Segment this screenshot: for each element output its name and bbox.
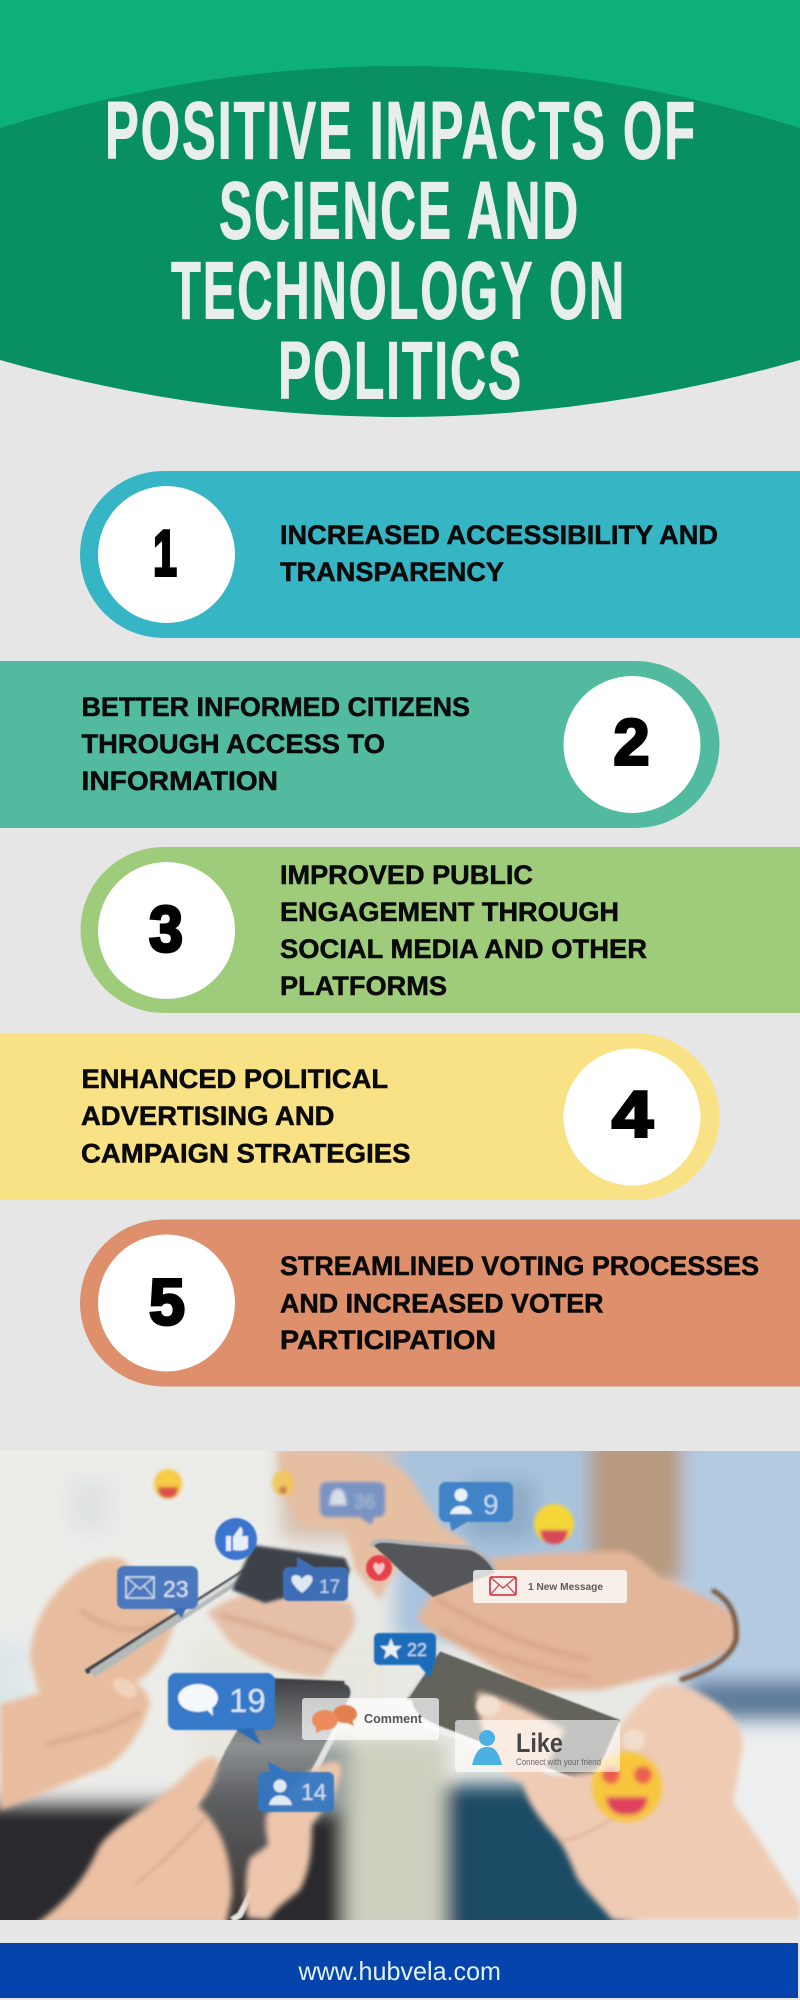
number circle 1: 1 (153, 516, 177, 590)
panel: item 1 (80, 471, 800, 638)
emoji: laughing right (534, 1504, 574, 1544)
title: SCIENCE AND (219, 166, 580, 256)
phone: grey upper right (371, 1540, 497, 1597)
emoji: faint yellow small (272, 1470, 294, 1496)
footer bar (0, 1943, 798, 1998)
text: item 2 (82, 692, 470, 796)
number circle 1 (98, 486, 235, 623)
number circle 4 (564, 1048, 700, 1186)
card: 1 New Message (473, 1570, 627, 1603)
panel: item 5 (80, 1220, 800, 1386)
card: Like (455, 1720, 620, 1772)
website url: www.hubvela.com (298, 1956, 501, 1986)
number circle 5: 5 (149, 1266, 185, 1338)
text: item 3: IMPROVED PUBLIC (280, 860, 533, 890)
title (105, 86, 697, 416)
number circle 5 (98, 1234, 235, 1372)
text: item 4 (81, 1064, 411, 1168)
number circle 3 (98, 862, 235, 999)
number circle 4: 4 (612, 1078, 653, 1150)
text: item 5: PARTICIPATION (280, 1325, 496, 1355)
text: item 4: ADVERTISING AND (81, 1101, 334, 1131)
hands upper layer (0, 1451, 737, 1810)
badge: star 22 (374, 1633, 436, 1678)
text: item 3: PLATFORMS (280, 971, 447, 1001)
card: Comment: Comment (364, 1711, 423, 1726)
header banner (0, 0, 800, 417)
text: item 2: THROUGH ACCESS TO (82, 729, 385, 759)
skin fold lines (45, 1598, 590, 1745)
badge: comment 19: 19 (229, 1682, 266, 1719)
text: item 2: BETTER INFORMED CITIZENS (82, 692, 470, 722)
number circle 2 (564, 676, 700, 813)
finger nails and hand details (110, 1675, 645, 1885)
text: item 5: AND INCREASED VOTER (280, 1288, 604, 1318)
blurred clothing background (0, 1451, 800, 1920)
card: Like: Like (516, 1728, 563, 1758)
badge: heart 17 (283, 1557, 348, 1601)
badge: star 22: 22 (407, 1640, 427, 1660)
badge: mail 23: 23 (163, 1576, 189, 1602)
panel: item 4 (0, 1033, 720, 1200)
text: item 1 (280, 520, 718, 587)
title: POLITICS (278, 326, 523, 416)
number circle 2: 2 (614, 706, 650, 778)
card: Comment (302, 1698, 439, 1740)
text: item 1: INCREASED ACCESSIBILITY AND (280, 520, 718, 550)
photo: hands holding smartphones with social media badges (0, 1451, 800, 1920)
text: item 1: TRANSPARENCY (280, 557, 504, 587)
badge: heart 17: 17 (319, 1577, 340, 1598)
badge: mail 23 (117, 1566, 198, 1618)
badge: person 14 (258, 1762, 334, 1812)
badge: person 9: 9 (483, 1489, 499, 1520)
icon: red heart circle (366, 1555, 392, 1581)
phone: slim silver (86, 1570, 250, 1674)
hands lower layer (35, 1685, 800, 1925)
badge: comment 19 (168, 1673, 275, 1745)
text: item 4: ENHANCED POLITICAL (82, 1064, 388, 1094)
phone: large centre (185, 1678, 354, 1920)
emoji: heart eyes (592, 1752, 662, 1822)
badge: person 14: 14 (301, 1779, 327, 1805)
badge: person 9 (439, 1482, 513, 1531)
watch strap (680, 1590, 736, 1680)
phone: dark upper (232, 1545, 350, 1603)
text: item 2: INFORMATION (82, 766, 278, 796)
number circle 3: 3 (149, 892, 183, 966)
text: item 3: ENGAGEMENT THROUGH (280, 897, 619, 927)
emoji: faint yellow top-left (154, 1469, 182, 1499)
badge: bell 36: 36 (354, 1492, 375, 1513)
phone: large right (407, 1651, 620, 1788)
badge: bell 36 (320, 1482, 385, 1525)
card: Like: Connect with your friend (516, 1757, 601, 1768)
badge: thumbs up (215, 1518, 257, 1560)
card: 1 New Message: 1 New Message (528, 1581, 603, 1593)
panel: item 3 (80, 847, 800, 1013)
text: item 5: STREAMLINED VOTING PROCESSES (280, 1251, 759, 1281)
text: item 3 (280, 860, 647, 1001)
text: item 5 (280, 1251, 759, 1355)
text: item 4: CAMPAIGN STRATEGIES (81, 1138, 411, 1168)
text: item 3: SOCIAL MEDIA AND OTHER (280, 934, 647, 964)
panel: item 2 (0, 661, 720, 828)
